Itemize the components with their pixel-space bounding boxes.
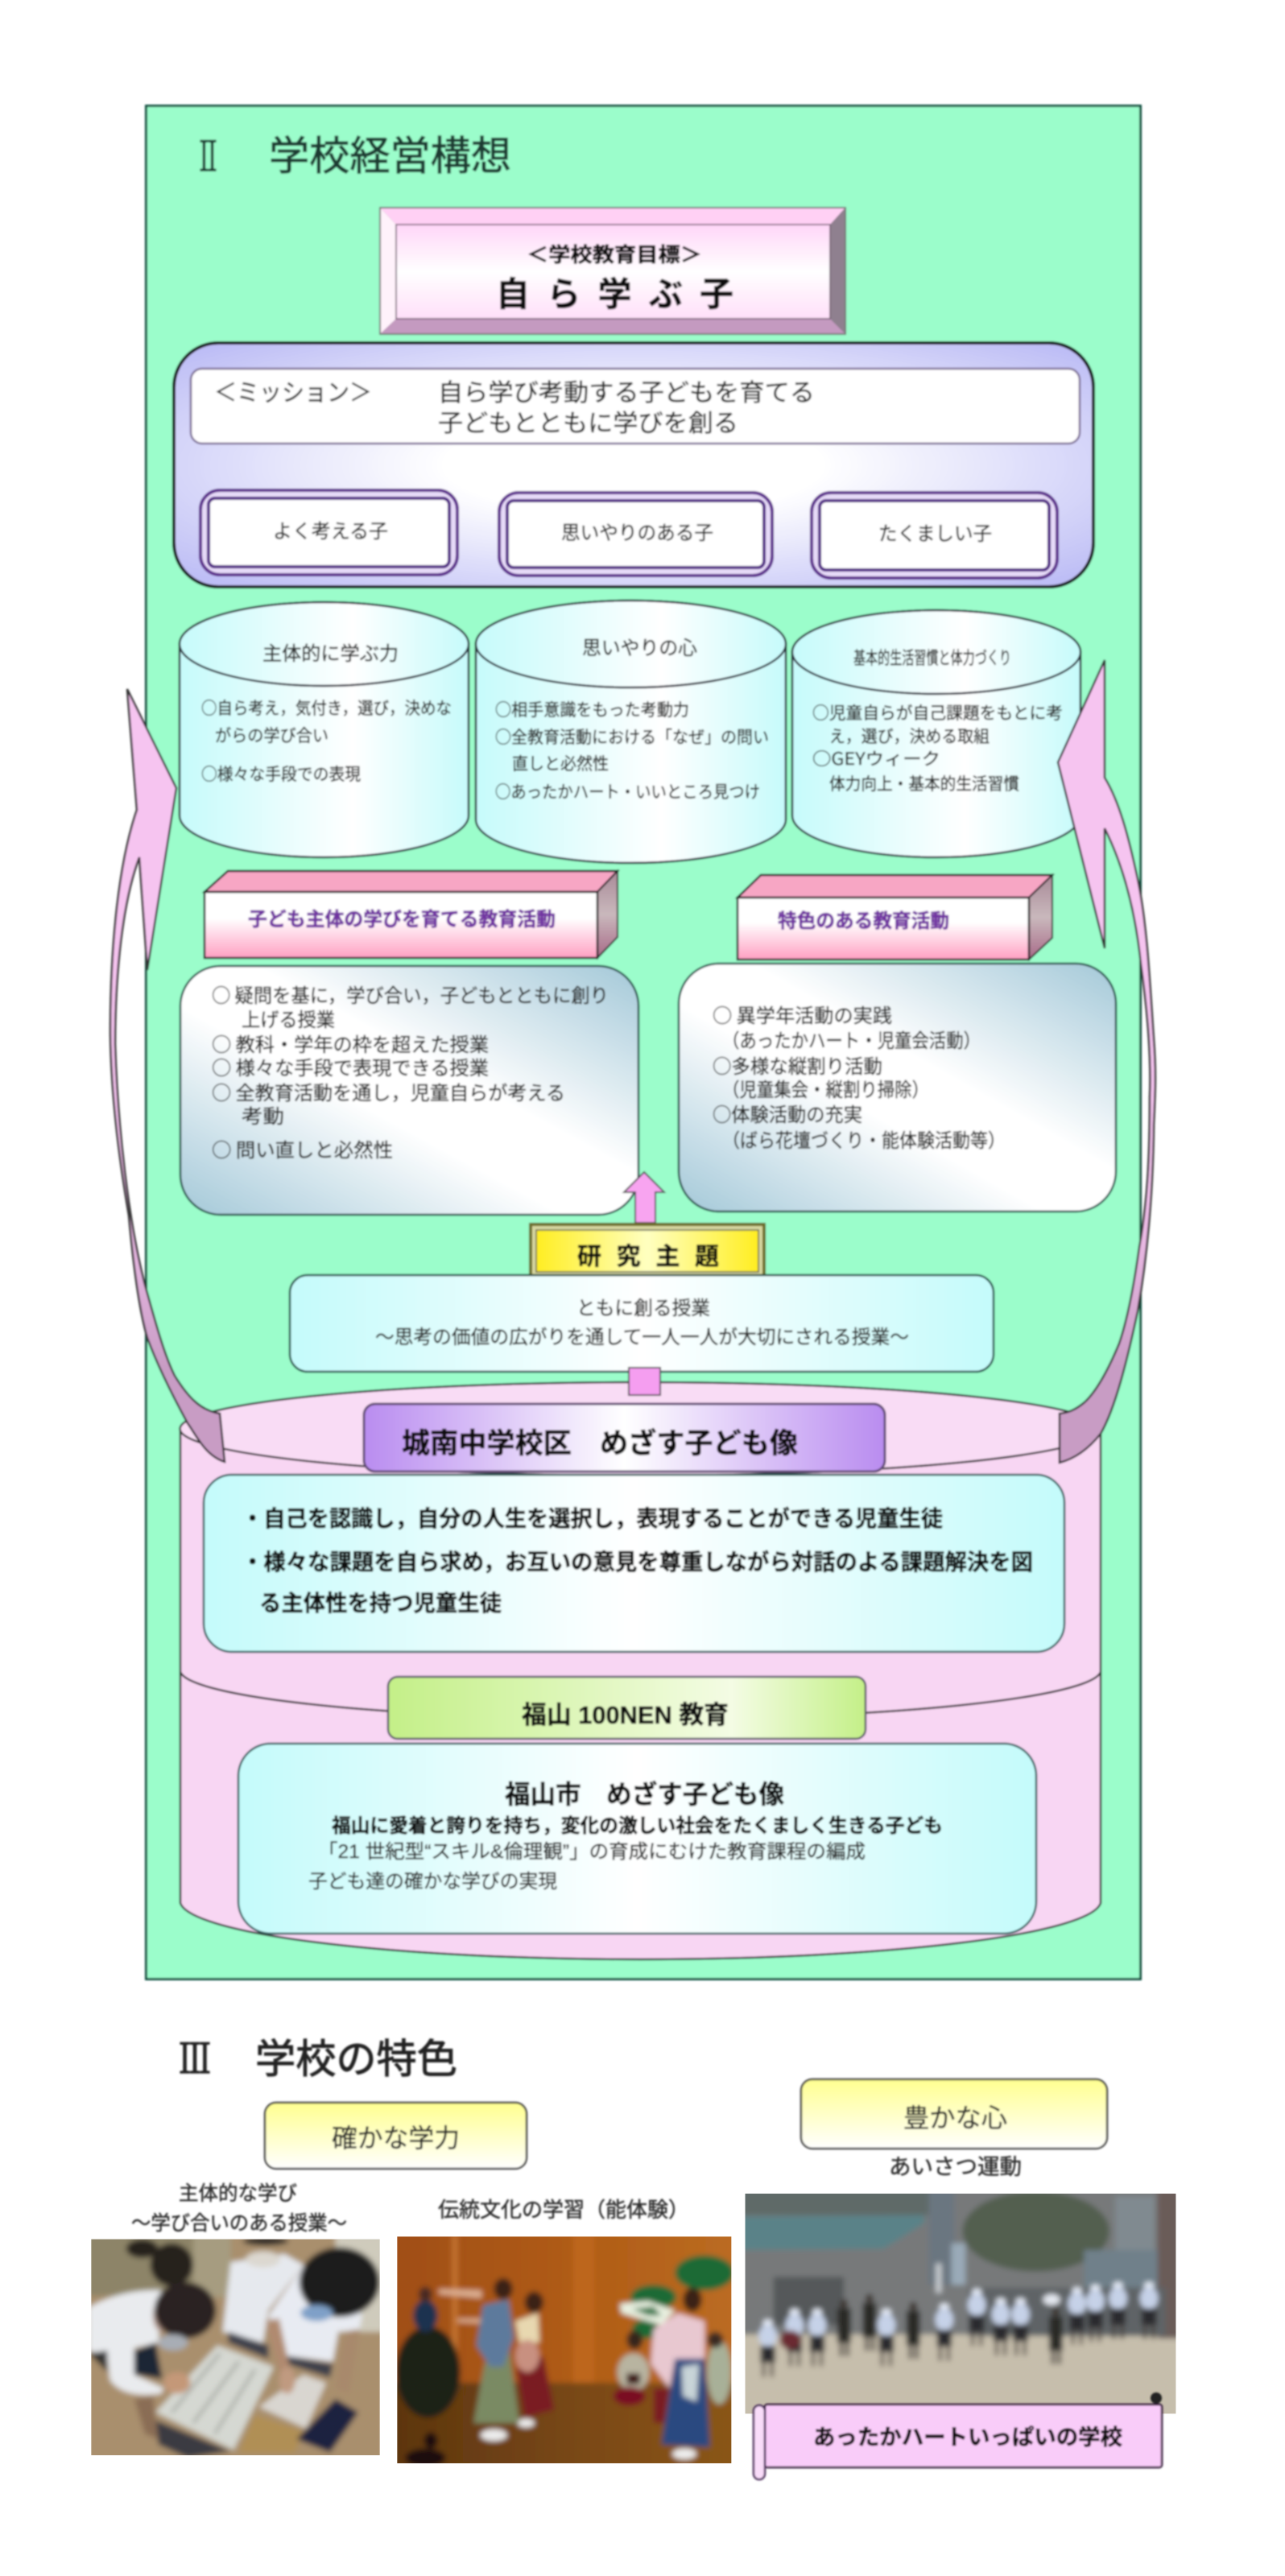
photo: classroom group work	[86, 2234, 385, 2461]
cylinder: compassion: 思いやりの心	[582, 638, 697, 659]
panel: child-centred activity list: ○ 様々な手段で表現できる授業	[212, 1052, 489, 1080]
panel: child-centred activity list: ○ 疑問を基に，学び合い，子どもとともに創り	[212, 980, 609, 1008]
research theme label: 研究主題	[577, 1244, 719, 1270]
school goal box	[379, 207, 846, 335]
child trait: resilient	[812, 493, 1057, 578]
mission statement bar	[191, 369, 1080, 444]
cylinder: basic habits and fitness: ○GEYウィーク	[812, 746, 940, 770]
research theme description	[290, 1275, 994, 1372]
3D label: distinctive activities	[738, 875, 1052, 960]
panel: Fukuyama city child ideal: 福山市 めざす子ども像	[505, 1780, 784, 1809]
heading: section III: Ⅲ	[179, 2027, 211, 2085]
school goal box: 自ら学ぶ子	[496, 275, 733, 313]
label: rich heart: 豊かな心	[903, 2103, 1007, 2132]
child trait: thinks well	[200, 490, 457, 575]
cylinder: independent learning: 主体的に学ぶ力	[262, 643, 399, 665]
child trait: resilient: たくましい子	[878, 523, 992, 545]
panel: Fukuyama city child ideal: 「21 世紀型“スキル&倫理観”」の育成にむけた教育課程の編成	[318, 1841, 866, 1863]
panel: child-centred activity list	[180, 966, 638, 1215]
caption: traditional culture: 伝統文化の学習（能体験）	[438, 2198, 689, 2222]
3D label: child-centred learning activities: 子ども主体の学びを育てる教育活動	[248, 909, 556, 931]
panel: child-centred activity list: ○ 全教育活動を通し，児童自らが考える	[212, 1077, 565, 1105]
cylinder: compassion: ○全教育活動における「なぜ」の問い	[495, 724, 769, 749]
panel: district child ideal: る主体性を持つ児童生徒	[259, 1591, 502, 1616]
panel: distinctive activity list: （あったかハート・児童会活動）	[722, 1030, 981, 1052]
caption: independent learning: ～学び合いのある授業～	[131, 2212, 347, 2235]
3D label: child-centred learning activities	[205, 871, 618, 958]
panel: distinctive activity list	[679, 964, 1116, 1212]
panel: child-centred activity list: 上げる授業	[242, 1009, 335, 1031]
panel: school management concept	[110, 106, 1155, 1979]
panel: Fukuyama city child ideal: 福山に愛着と誇りを持ち，変化の激しい社会をたくましく生きる子ども	[332, 1815, 943, 1837]
cylinder: basic habits and fitness: 基本的生活習慣と体力づくり	[853, 648, 1011, 668]
connector square	[629, 1368, 660, 1395]
label: Jonan junior high district: 城南中学校区 めざす子ども像	[402, 1427, 798, 1459]
caption: greeting movement: あいさつ運動	[889, 2155, 1022, 2179]
label: solid academic ability: 確かな学力	[332, 2124, 460, 2153]
research theme label	[529, 1223, 766, 1279]
3D label: distinctive activities: 特色のある教育活動	[778, 910, 949, 932]
cylinder: compassion: ○相手意識をもった考動力	[495, 697, 689, 721]
heading: section III: 学校の特色	[255, 2037, 457, 2082]
cylinder: basic habits and fitness	[792, 610, 1080, 857]
label: Fukuyama 100NEN education: 福山 100NEN 教育	[522, 1701, 729, 1729]
arrow: left curved	[110, 689, 225, 1462]
heading: section II: Ⅱ	[196, 125, 221, 183]
panel: distinctive activity list: （児童集会・縦割り掃除）	[722, 1080, 929, 1101]
child trait: thinks well: よく考える子	[273, 521, 388, 543]
school goal box: ＜学校教育目標＞	[527, 239, 702, 268]
panel: distinctive activity list: ○ 異学年活動の実践	[713, 1000, 892, 1028]
cylinder: compassion: ○あったかハート・いいところ見つけ	[495, 779, 760, 803]
label: solid academic ability	[265, 2103, 527, 2169]
research theme description: ～思考の価値の広がりを通して一人一人が大切にされる授業～	[375, 1327, 909, 1348]
panel: district child ideal: ・様々な課題を自ら求め，お互いの意見を尊重しながら対話のよる課題解決を図	[242, 1549, 1033, 1575]
cylinder: compassion	[476, 601, 786, 863]
label: Fukuyama 100NEN education	[388, 1677, 866, 1739]
photo: greeting movement in schoolyard	[740, 2188, 1183, 2421]
cylinder: basic habits and fitness: え，選び，決める取組	[829, 728, 990, 746]
banner scroll: school full of warm hearts: あったかハートいっぱいの学校	[813, 2425, 1122, 2450]
banner scroll: school full of warm hearts	[754, 2392, 1162, 2479]
cylinder: independent learning: ○様々な手段での表現	[201, 762, 361, 786]
cylinder: independent learning: がらの学び合い	[215, 727, 328, 745]
panel: distinctive activity list: （ばら花壇づくり・能体験活動等）	[722, 1130, 1006, 1152]
child trait: considerate: 思いやりのある子	[561, 522, 713, 544]
panel: distinctive activity list: ○多様な縦割り活動	[713, 1051, 882, 1079]
panel: Fukuyama city child ideal	[238, 1744, 1036, 1934]
mission statement bar: 自ら学び考動する子どもを育てる	[438, 380, 815, 407]
panel: district child ideal	[204, 1475, 1064, 1652]
arrow: research theme upward	[624, 1172, 664, 1223]
mission statement bar: ＜ミッション＞	[214, 373, 372, 408]
stacked cylinder: district and city	[180, 1382, 1101, 1959]
label: Jonan junior high district	[364, 1404, 885, 1472]
panel: Fukuyama city child ideal: 子ども達の確かな学びの実現	[308, 1871, 557, 1893]
heading: section II: 学校経営構想	[269, 134, 511, 179]
caption: independent learning	[131, 2182, 347, 2235]
cylinder: basic habits and fitness: ○児童自らが自己課題をもとに考	[812, 700, 1063, 724]
panel: distinctive activity list: ○体験活動の充実	[713, 1099, 862, 1127]
research theme description: ともに創る授業	[576, 1298, 710, 1319]
panel: child-centred activity list: ○ 教科・学年の枠を超えた授業	[212, 1029, 489, 1057]
cylinder: independent learning	[180, 602, 469, 857]
cylinder: basic habits and fitness: 体力向上・基本的生活習慣	[829, 775, 1019, 794]
panel: child-centred activity list: ○ 問い直しと必然性	[212, 1134, 393, 1162]
panel: district child ideal: ・自己を認識し，自分の人生を選択し，表現することができる児童生徒	[242, 1505, 943, 1531]
heading: section II	[196, 125, 511, 183]
caption: independent learning: 主体的な学び	[179, 2182, 297, 2205]
cylinder: compassion: 直しと必然性	[512, 755, 609, 774]
child trait: considerate	[499, 493, 772, 576]
photo: Noh experience	[392, 2231, 738, 2469]
heading: section III	[179, 2027, 457, 2085]
cylinder: independent learning: ○自ら考え，気付き，選び，決めな	[201, 696, 452, 720]
panel: child-centred activity list: 考動	[242, 1106, 284, 1128]
mission statement bar: 子どもとともに学びを創る	[438, 411, 738, 437]
label: rich heart	[801, 2079, 1107, 2149]
panel: mission	[174, 343, 1093, 587]
arrow: right curved	[1058, 660, 1155, 1463]
